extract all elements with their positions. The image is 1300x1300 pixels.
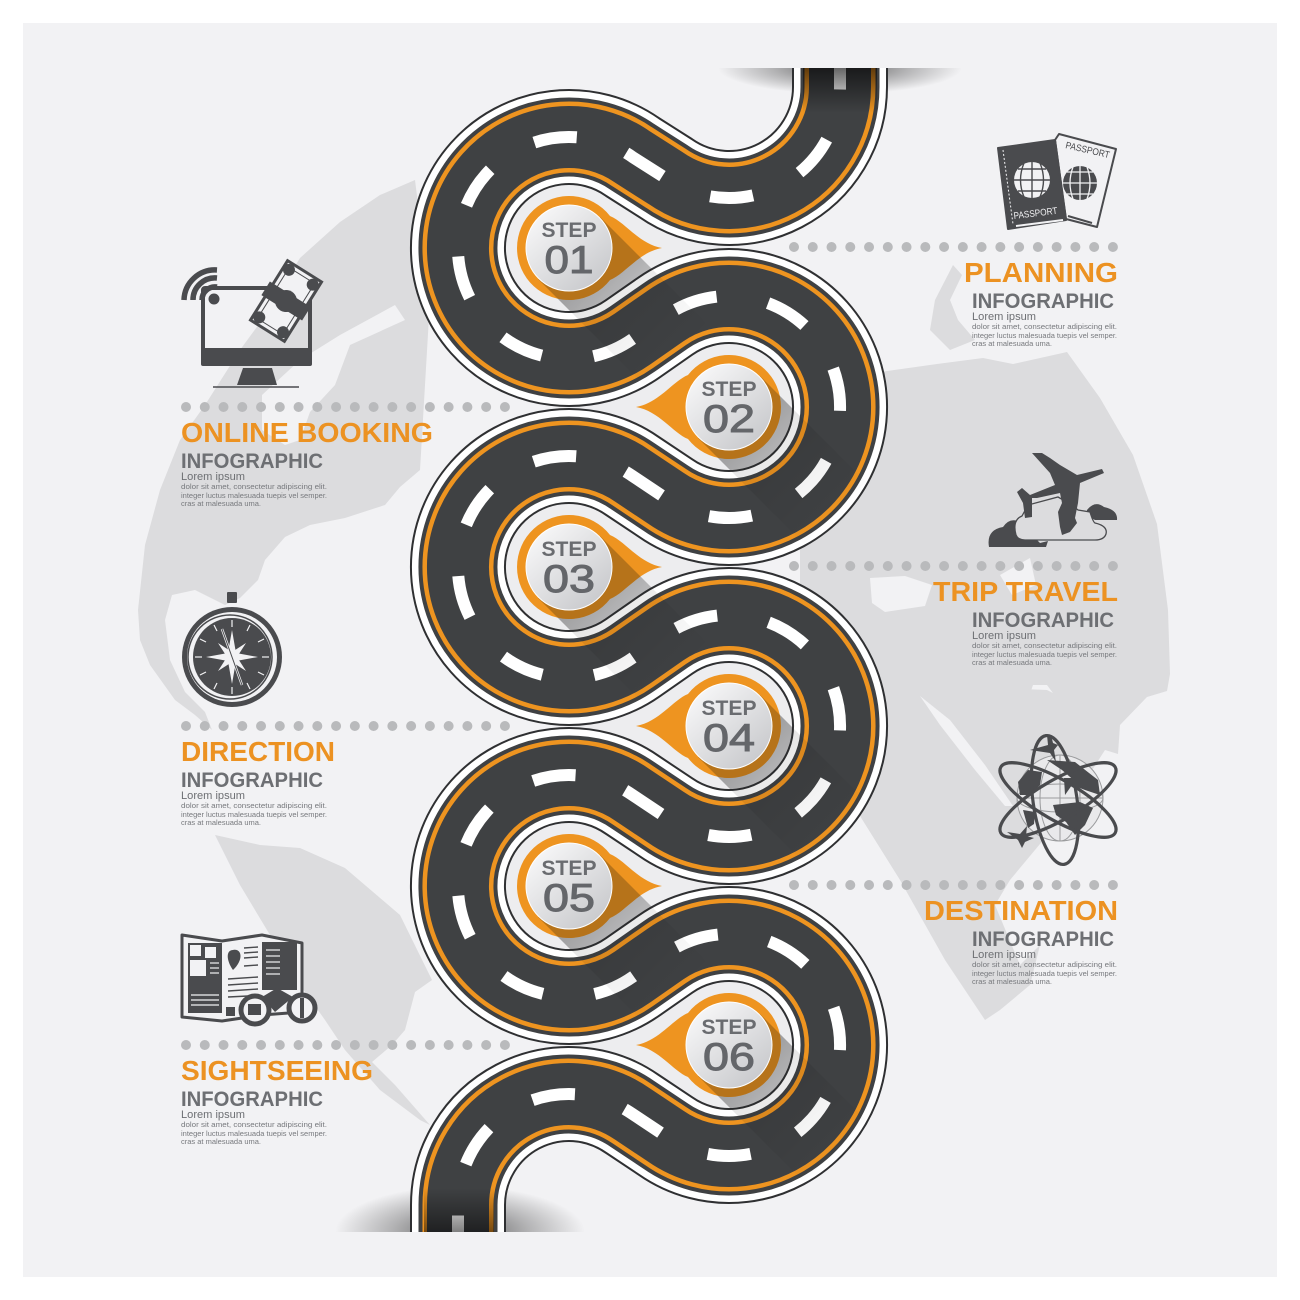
step 01 marker — [517, 196, 687, 356]
text block: direction — [181, 736, 335, 827]
step 03 marker: STEP — [542, 538, 596, 561]
road end fade: top — [803, 68, 877, 113]
text block: sightseeing: cras at malesuada uma. — [181, 1137, 261, 1146]
icon: plane and clouds — [989, 453, 1117, 547]
text block: sightseeing: Lorem ipsum — [181, 1109, 245, 1121]
step 02 marker — [636, 355, 831, 498]
icon: monitor with wifi and banknote — [184, 259, 325, 387]
slit shadow: bottom — [342, 1192, 578, 1232]
text block: sightseeing: SIGHTSEEING — [181, 1055, 373, 1086]
text block: direction: cras at malesuada uma. — [181, 818, 261, 827]
text block: sightseeing: dolor sit amet, consectetur adipiscing elit. — [181, 1120, 327, 1129]
text block: planning: cras at malesuada uma. — [972, 339, 1052, 348]
text block: trip travel: INFOGRAPHIC — [972, 609, 1114, 632]
step 02 marker: 02 — [703, 398, 755, 441]
step 06 marker — [636, 993, 830, 1136]
sea: arctic gap — [262, 305, 405, 445]
text block: sightseeing: INFOGRAPHIC — [181, 1088, 323, 1111]
text block: online booking: cras at malesuada uma. — [181, 499, 261, 508]
text block: planning: dolor sit amet, consectetur adipiscing elit. — [972, 322, 1117, 331]
step 04 marker — [636, 674, 831, 817]
land: scandinavia — [930, 265, 975, 350]
dotted divider lines — [186, 247, 1114, 1045]
text block: online booking: dolor sit amet, consectetur adipiscing elit. — [181, 482, 327, 491]
land: eurasia — [800, 352, 1170, 790]
text block: trip travel: Lorem ipsum — [972, 630, 1036, 642]
text block: destination — [924, 895, 1118, 986]
text block: destination: dolor sit amet, consectetur adipiscing elit. — [972, 960, 1117, 969]
road islands — [499, 178, 799, 1115]
step 03 marker — [517, 515, 687, 674]
sea: red sea — [920, 696, 1013, 806]
text block: destination: cras at malesuada uma. — [972, 977, 1052, 986]
world map background — [138, 180, 1170, 1125]
text block: trip travel: TRIP TRAVEL — [933, 576, 1118, 607]
road end fade: bottom — [424, 1188, 494, 1232]
text block: sightseeing: integer luctus malesuada tuepis vel semper. — [181, 1129, 327, 1138]
step 05 marker: STEP — [542, 857, 596, 880]
icon: globe with orbiting planes — [991, 733, 1125, 867]
text block: trip travel — [933, 576, 1118, 667]
text block: online booking: integer luctus malesuada tuepis vel semper. — [181, 491, 327, 500]
sea: mediterranean — [870, 576, 932, 612]
winding road — [458, 68, 840, 1232]
step 01 marker: 01 — [544, 239, 594, 282]
text block: online booking: ONLINE BOOKING — [181, 417, 433, 448]
text block: trip travel: integer luctus malesuada tuepis vel semper. — [972, 650, 1117, 659]
text block: direction: Lorem ipsum — [181, 790, 245, 802]
land: south america — [215, 835, 432, 1125]
text block: trip travel: dolor sit amet, consectetur adipiscing elit. — [972, 641, 1117, 650]
text block: destination: DESTINATION — [924, 895, 1118, 926]
step 03 marker: 03 — [543, 558, 595, 601]
step 06 marker: 06 — [703, 1036, 755, 1079]
text block: planning: integer luctus malesuada tuepis vel semper. — [972, 331, 1117, 340]
text block: direction: dolor sit amet, consectetur adipiscing elit. — [181, 801, 327, 810]
text block: planning: Lorem ipsum — [972, 311, 1036, 323]
icon: passports: PASSPORT — [1013, 206, 1058, 222]
text block: destination: Lorem ipsum — [972, 949, 1036, 961]
text block: online booking: INFOGRAPHIC — [181, 450, 323, 473]
step 04 marker: 04 — [703, 717, 755, 760]
text block: destination: INFOGRAPHIC — [972, 928, 1114, 951]
text block: direction: INFOGRAPHIC — [181, 769, 323, 792]
text block: direction: DIRECTION — [181, 736, 335, 767]
text block: destination: integer luctus malesuada tuepis vel semper. — [972, 969, 1117, 978]
icon: compass — [182, 592, 282, 707]
step 02 marker: STEP — [702, 378, 756, 401]
island long shadows — [538, 217, 866, 1182]
step 06 marker: STEP — [702, 1016, 756, 1039]
land: africa — [800, 680, 1117, 1020]
text block: online booking: Lorem ipsum — [181, 471, 245, 483]
icon: brochure map and binoculars — [182, 935, 315, 1024]
sea: black sea — [1000, 558, 1036, 595]
text block: planning: PLANNING — [964, 257, 1118, 288]
slit shadow: top — [726, 68, 954, 90]
step 01 marker: STEP — [542, 219, 596, 242]
step 05 marker — [517, 834, 687, 994]
step 05 marker: 05 — [543, 877, 595, 920]
icon: passports — [998, 134, 1116, 229]
text block: trip travel: cras at malesuada uma. — [972, 658, 1052, 667]
icon: passports: PASSPORT — [1064, 140, 1111, 161]
step 04 marker: STEP — [702, 697, 756, 720]
text block: planning: INFOGRAPHIC — [972, 290, 1114, 313]
text block: online booking — [181, 417, 433, 508]
text block: sightseeing — [181, 1055, 373, 1146]
text block: direction: integer luctus malesuada tuepis vel semper. — [181, 810, 327, 819]
land: north america — [138, 180, 430, 730]
text block: planning — [964, 257, 1118, 348]
